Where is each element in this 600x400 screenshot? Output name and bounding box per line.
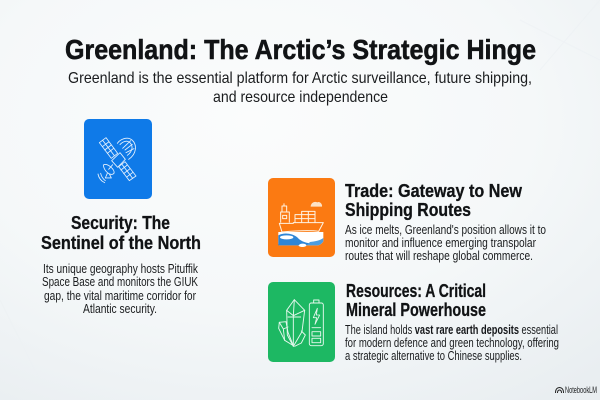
heading: resources: Resources: A Critical <box>346 280 486 301</box>
subtitle: Greenland is the essential platform for Arctic surveillance, future shipping, <box>68 70 532 87</box>
heading: trade <box>345 180 523 220</box>
title: Greenland: The Arctic’s Strategic Hinge <box>65 34 536 65</box>
text: resources body: The island holds vast rare earth deposits essential <box>345 323 558 337</box>
text: security body: Its unique geography hosts Pituffik <box>43 262 199 276</box>
text: resources body <box>345 323 559 363</box>
text: resources body: a strategic alternative to Chinese supplies. <box>345 349 522 363</box>
text: trade body: As ice melts, Greenland's position allows it to <box>345 223 546 237</box>
text: trade body: monitor and influence emerging transpolar <box>345 236 536 250</box>
panel: trade <box>268 178 546 263</box>
heading: resources: Mineral Powerhouse <box>346 299 486 320</box>
icon: container ship <box>268 178 335 257</box>
icon: crystals and battery <box>268 282 335 362</box>
text: trade body <box>345 223 546 263</box>
text: security body: Atlantic security. <box>83 302 157 316</box>
subtitle <box>68 70 532 106</box>
icon: satellite <box>84 119 152 199</box>
panel: security <box>41 119 201 316</box>
text: security body <box>42 262 199 316</box>
heading: security <box>41 212 201 253</box>
text: security body: Space Base and monitors the GIUK <box>42 275 199 289</box>
text: trade body: routes that will reshape global commerce. <box>345 249 533 263</box>
panel: resources <box>268 280 559 363</box>
subtitle: and resource independence <box>213 89 388 106</box>
heading: security: Security: The <box>71 212 170 233</box>
heading: trade: Trade: Gateway to New <box>345 180 523 201</box>
heading: trade: Shipping Routes <box>345 199 471 220</box>
heading: security: Sentinel of the North <box>41 232 201 253</box>
text: security body: gap, the vital maritime corridor for <box>44 289 196 303</box>
heading: resources <box>346 280 486 320</box>
